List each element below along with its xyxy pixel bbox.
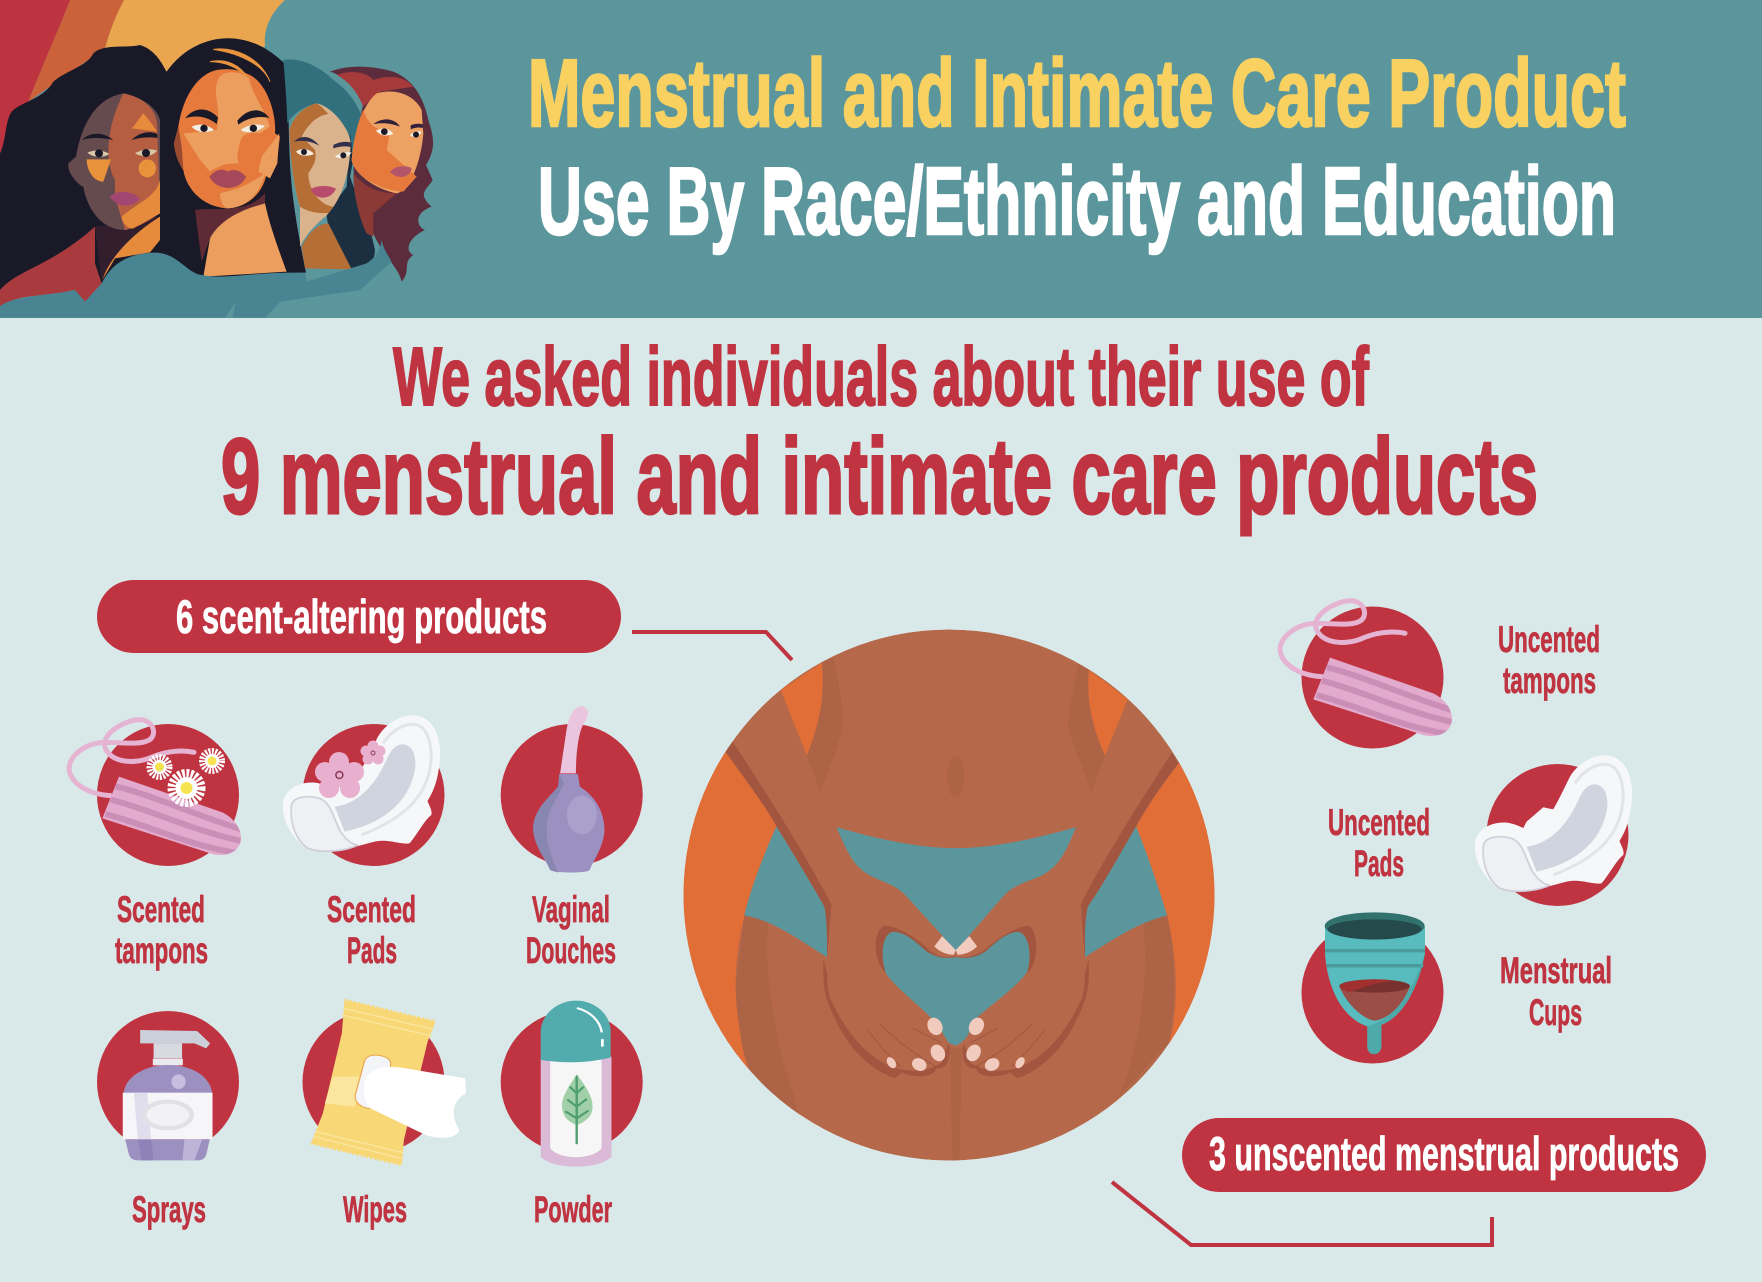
label: menstrual cups: Cups xyxy=(1529,992,1582,1033)
label: uncented pads: Pads xyxy=(1354,843,1404,884)
icon: unscented tampons xyxy=(1280,601,1455,748)
label: scented pads: Pads xyxy=(347,930,397,971)
label: scented tampons: Scented xyxy=(117,889,205,930)
icon: scented pads xyxy=(283,715,444,866)
connector arrow: scented group to figure xyxy=(632,632,792,660)
header band xyxy=(0,0,1762,320)
label: sprays: Sprays xyxy=(132,1189,206,1230)
label: scented pads: Scented xyxy=(327,889,416,930)
label: scented tampons xyxy=(115,889,208,971)
label: uncented tampons: Uncented xyxy=(1498,619,1600,660)
icon: vaginal douches xyxy=(501,706,643,873)
icon: wipes xyxy=(302,1000,466,1165)
pill: 6 scent-altering products xyxy=(97,580,621,653)
icon: menstrual cups xyxy=(1302,912,1444,1064)
label: uncented pads: Uncented xyxy=(1328,802,1430,843)
label: menstrual cups xyxy=(1500,950,1612,1033)
central illustration: hands forming heart over abdomen xyxy=(670,630,1230,1161)
illustration: four women xyxy=(0,0,433,320)
icon: scented tampons xyxy=(69,720,244,866)
pill: 3 unscented menstrual products xyxy=(1182,1118,1706,1192)
connector arrow: unscented group to figure xyxy=(1112,1182,1492,1245)
icon: powder xyxy=(501,1001,643,1167)
label: powder: Powder xyxy=(534,1189,612,1230)
label: wipes: Wipes xyxy=(343,1189,407,1230)
label: menstrual cups: Menstrual xyxy=(1500,950,1612,991)
label: uncented pads xyxy=(1328,802,1430,884)
label: scented tampons: tampons xyxy=(115,930,208,971)
icon: unscented pads xyxy=(1475,755,1632,906)
title xyxy=(528,40,1626,255)
label: vaginal douches: Douches xyxy=(526,930,616,971)
label: scented pads xyxy=(327,889,416,971)
icon: sprays xyxy=(97,1011,239,1160)
heading xyxy=(221,330,1538,536)
label: uncented tampons: tampons xyxy=(1503,660,1596,701)
pill: 6 scent-altering products: 6 scent-altering products xyxy=(176,590,547,643)
label: vaginal douches xyxy=(526,889,616,971)
label: vaginal douches: Vaginal xyxy=(532,889,610,930)
label: uncented tampons xyxy=(1498,619,1600,701)
